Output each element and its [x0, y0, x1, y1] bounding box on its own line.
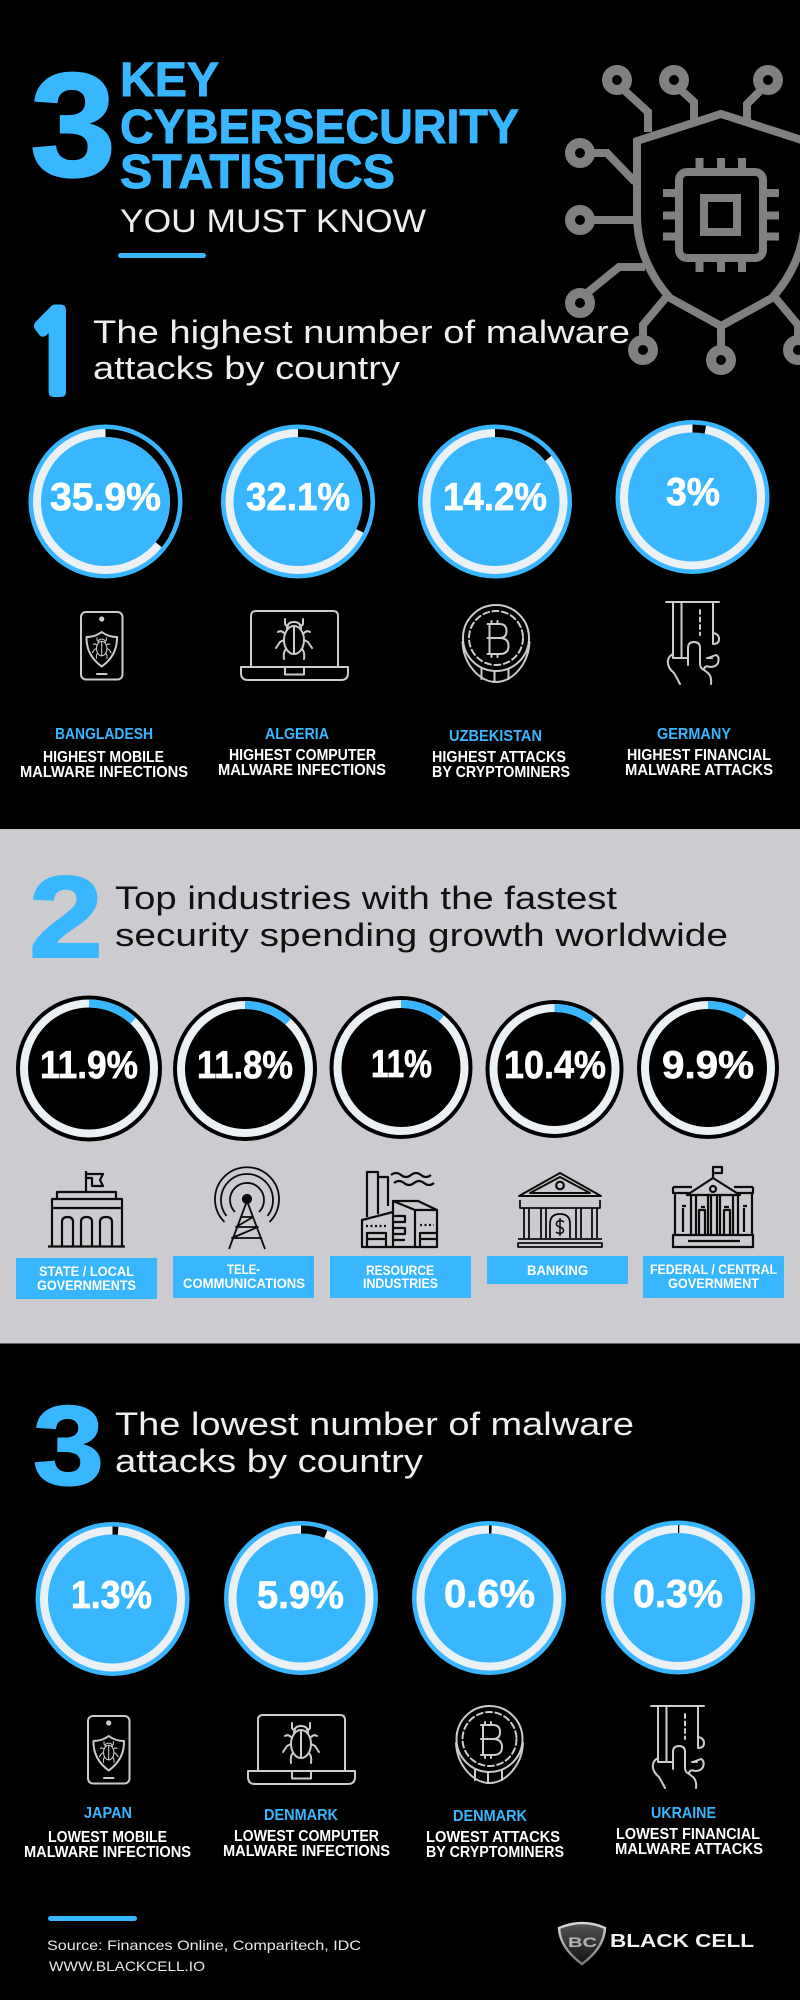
- label box: resource industries: INDUSTRIES: [363, 1275, 438, 1291]
- label: Denmark computer: LOWEST COMPUTER: [234, 1828, 379, 1845]
- icon: factory: [362, 1172, 437, 1247]
- label: Algeria: ALGERIA: [265, 726, 329, 743]
- heading text: security spending growth worldwide: [115, 917, 728, 953]
- numeral 3: 3: [33, 1383, 104, 1508]
- subtitle: YOU MUST KNOW: [120, 203, 427, 239]
- donut: 35.9% Bangladesh: 35.9%: [50, 476, 161, 519]
- donut: 14.2% Uzbekistan: [418, 424, 572, 578]
- donut: 0.3% Ukraine: [601, 1520, 755, 1674]
- panel: grey section 2 background: [0, 829, 800, 1344]
- label: Uzbekistan: HIGHEST ATTACKS: [432, 749, 566, 766]
- label: Bangladesh: BANGLADESH: [55, 726, 153, 743]
- label box: state and local governments: GOVERNMENTS: [37, 1277, 136, 1293]
- label: Denmark computer: [223, 1807, 390, 1860]
- donut: 32.1% Algeria: 32.1%: [246, 476, 350, 519]
- title: key cybersecurity statistics: CYBERSECURITY: [120, 101, 519, 154]
- label: Denmark computer: DENMARK: [264, 1807, 338, 1824]
- donut: 11.8% telecommunications: [173, 997, 317, 1141]
- icon: laptop with bug: [248, 1715, 355, 1784]
- label: Germany: [625, 726, 773, 779]
- icon: shield with circuit chip: [570, 70, 800, 370]
- donut: 10.4% banking: 10.4%: [504, 1044, 606, 1087]
- label: Denmark computer: MALWARE INFECTIONS: [223, 1843, 390, 1860]
- donut: 0.6% Denmark cryptominers: [412, 1521, 566, 1675]
- numeral 2: 2: [29, 852, 103, 982]
- donut: 5.9% Denmark computer: 5.9%: [257, 1574, 344, 1617]
- donut: 11% resource industries: [330, 996, 472, 1139]
- icon: government building with flag: [48, 1171, 125, 1246]
- donut: 1.3% Japan: 1.3%: [71, 1574, 152, 1617]
- label box: banking: BANKING: [527, 1262, 588, 1278]
- title: key cybersecurity statistics: STATISTICS: [120, 146, 395, 199]
- label: Bangladesh: HIGHEST MOBILE: [43, 749, 164, 766]
- label: Ukraine: [615, 1805, 763, 1858]
- label box: state and local governments: STATE / LOCAL: [39, 1263, 134, 1279]
- title: key cybersecurity statistics: KEY: [120, 54, 219, 107]
- donut: 3% Germany: 3%: [666, 471, 720, 514]
- icon: hand with card: [651, 1706, 704, 1788]
- numeral 1: 1: [24, 299, 86, 410]
- label: Algeria: [218, 726, 386, 779]
- label: Japan: [24, 1805, 191, 1861]
- label: Japan: JAPAN: [84, 1805, 132, 1822]
- heading text: attacks by country: [115, 1443, 423, 1479]
- label: Denmark cryptominers: [426, 1808, 564, 1861]
- icon: phone with bug shield: [81, 612, 122, 680]
- label box: telecommunications: [173, 1256, 314, 1298]
- donut: 35.9% Bangladesh: [28, 424, 182, 578]
- label: Denmark cryptominers: DENMARK: [453, 1808, 527, 1825]
- footer accent bar: [48, 1916, 137, 1921]
- donut: 0.6% Denmark cryptominers: 0.6%: [444, 1573, 535, 1616]
- donut: 32.1% Algeria: [221, 424, 375, 578]
- heading text: [115, 880, 728, 953]
- donut: 1.3% Japan: [36, 1522, 190, 1676]
- icon: laptop with bug: [241, 611, 348, 680]
- label: Uzbekistan: UZBEKISTAN: [449, 728, 542, 745]
- logo: Black Cell: [559, 1923, 754, 1964]
- label: Ukraine: UKRAINE: [651, 1805, 716, 1822]
- heading text: [115, 1406, 634, 1479]
- label box: telecommunications: TELE-: [227, 1261, 260, 1277]
- label: Ukraine: LOWEST FINANCIAL: [616, 1826, 760, 1843]
- icon: radio tower: [215, 1167, 279, 1249]
- label: Germany: GERMANY: [657, 726, 731, 743]
- donut: 14.2% Uzbekistan: 14.2%: [443, 476, 547, 519]
- label: Denmark cryptominers: LOWEST ATTACKS: [426, 1829, 560, 1846]
- icon: capitol building: [673, 1167, 753, 1247]
- label: Japan: MALWARE INFECTIONS: [24, 1844, 191, 1861]
- donut: 11% resource industries: 11%: [371, 1043, 432, 1086]
- title: key cybersecurity statistics: [120, 54, 519, 199]
- label: Denmark cryptominers: BY CRYPTOMINERS: [426, 1844, 564, 1861]
- heading text: attacks by country: [93, 350, 400, 386]
- donut: 5.9% Denmark computer: [224, 1521, 378, 1675]
- footer source text: Source: Finances Online, Comparitech, IDC: [47, 1937, 361, 1953]
- label box: banking: [487, 1256, 628, 1284]
- section 3 heading: [33, 1383, 634, 1508]
- label: Ukraine: MALWARE ATTACKS: [615, 1841, 763, 1858]
- icon: hand with card: [666, 602, 719, 684]
- title numeral 3: 3: [30, 43, 116, 208]
- label box: state and local governments: [16, 1258, 157, 1299]
- section 2 heading: [29, 852, 728, 982]
- logo: Black Cell: BLACK CELL: [610, 1931, 754, 1951]
- heading text: Top industries with the fastest: [115, 880, 617, 916]
- donut: 3% Germany: [616, 420, 770, 574]
- footer source text: [47, 1937, 361, 1974]
- label box: federal and central government: [643, 1256, 784, 1298]
- label: Uzbekistan: BY CRYPTOMINERS: [432, 764, 570, 781]
- label box: federal and central government: FEDERAL / CENTRAL: [650, 1261, 777, 1277]
- footer source text: WWW.BLACKCELL.IO: [49, 1958, 205, 1974]
- label: Germany: HIGHEST FINANCIAL: [627, 747, 771, 764]
- label: Algeria: HIGHEST COMPUTER: [229, 747, 376, 764]
- donut: 10.4% banking: [486, 1000, 624, 1138]
- heading text: The highest number of malware: [93, 314, 630, 350]
- icon: bitcoin coin: [456, 1706, 523, 1783]
- label box: telecommunications: COMMUNICATIONS: [183, 1275, 305, 1291]
- donut: 11.9% state and local governments: [16, 996, 162, 1142]
- icon: phone with bug shield: [88, 1716, 130, 1784]
- donut: 0.3% Ukraine: 0.3%: [633, 1573, 723, 1616]
- donut: 9.9% federal and central government: [637, 997, 779, 1139]
- label: Algeria: MALWARE INFECTIONS: [218, 762, 386, 779]
- icon: bitcoin coin: [462, 605, 530, 682]
- heading text: The lowest number of malware: [115, 1406, 634, 1442]
- section 1 heading: [24, 299, 630, 410]
- label: Japan: LOWEST MOBILE: [48, 1829, 167, 1846]
- label: Germany: MALWARE ATTACKS: [625, 762, 773, 779]
- donut: 11.9% state and local governments: 11.9%: [40, 1044, 138, 1087]
- donut: 11.8% telecommunications: 11.8%: [197, 1044, 293, 1087]
- icon: bank: [518, 1173, 602, 1247]
- panel: header: [30, 43, 519, 258]
- label box: resource industries: [330, 1256, 471, 1298]
- label box: federal and central government: GOVERNMENT: [668, 1275, 759, 1291]
- logo: Black Cell: BC: [568, 1934, 597, 1950]
- label: Uzbekistan: [432, 728, 570, 781]
- header accent bar: [118, 253, 206, 258]
- label box: resource industries: RESOURCE: [366, 1262, 434, 1278]
- heading text: [93, 314, 630, 386]
- label: Bangladesh: MALWARE INFECTIONS: [20, 764, 188, 781]
- label: Bangladesh: [20, 726, 188, 781]
- donut: 9.9% federal and central government: 9.9%: [662, 1044, 754, 1087]
